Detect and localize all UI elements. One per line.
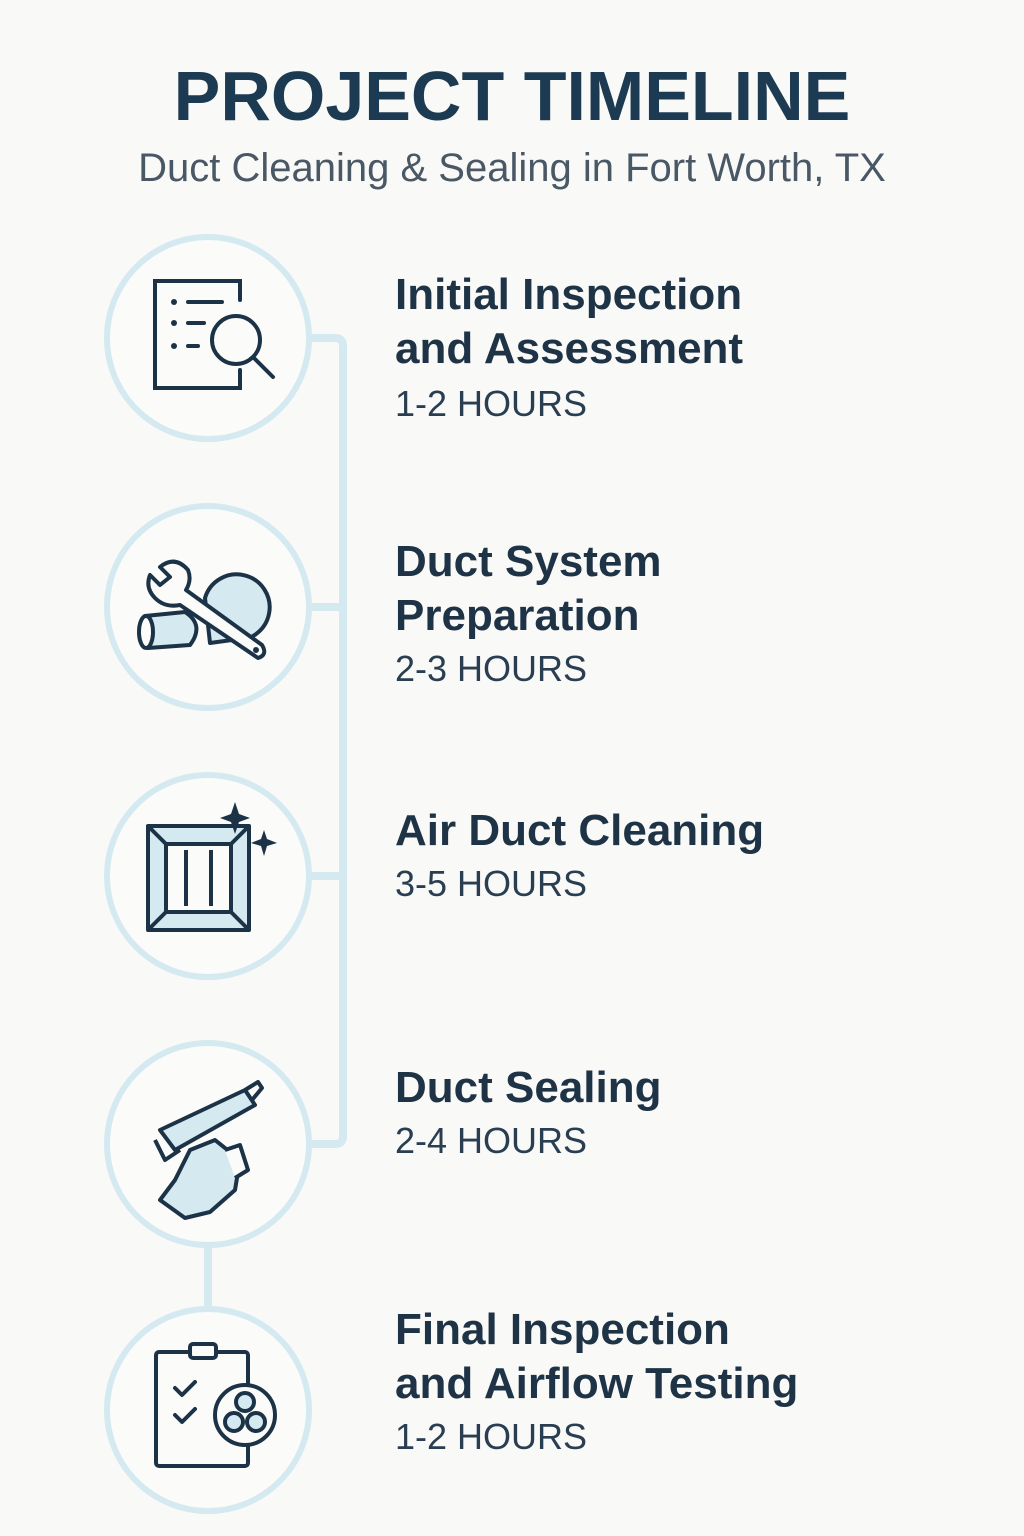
circle 4 with caulk gun icon xyxy=(107,1043,309,1245)
circle 2 with tools icon xyxy=(107,506,309,708)
step 3 text xyxy=(395,806,764,904)
step 1 text: 1-2 HOURS xyxy=(395,383,587,424)
step 2 text: 2-3 HOURS xyxy=(395,648,587,689)
circle 3 with duct icon xyxy=(107,775,309,977)
step 5 text: Final Inspection xyxy=(395,1305,730,1354)
step 1 text: Initial Inspection xyxy=(395,270,742,319)
step 1 text: and Assessment xyxy=(395,324,743,373)
title: PROJECT TIMELINE xyxy=(174,57,850,135)
step 4 text: 2-4 HOURS xyxy=(395,1120,587,1161)
step 4 text xyxy=(395,1063,662,1161)
step 2 text: Duct System xyxy=(395,537,662,586)
step 4 text: Duct Sealing xyxy=(395,1063,662,1112)
step 5 text: and Airflow Testing xyxy=(395,1359,798,1408)
step 2 text xyxy=(395,537,662,689)
step 5 text xyxy=(395,1305,798,1457)
circle 1 with inspection icon xyxy=(107,237,309,439)
step 1 text xyxy=(395,270,743,424)
step 3 text: 3-5 HOURS xyxy=(395,863,587,904)
step 2 text: Preparation xyxy=(395,591,640,640)
step 5 text: 1-2 HOURS xyxy=(395,1416,587,1457)
circle 5 with checklist and fan icon xyxy=(107,1309,309,1511)
subtitle: Duct Cleaning & Sealing in Fort Worth, TX xyxy=(138,146,886,190)
step 3 text: Air Duct Cleaning xyxy=(395,806,764,855)
